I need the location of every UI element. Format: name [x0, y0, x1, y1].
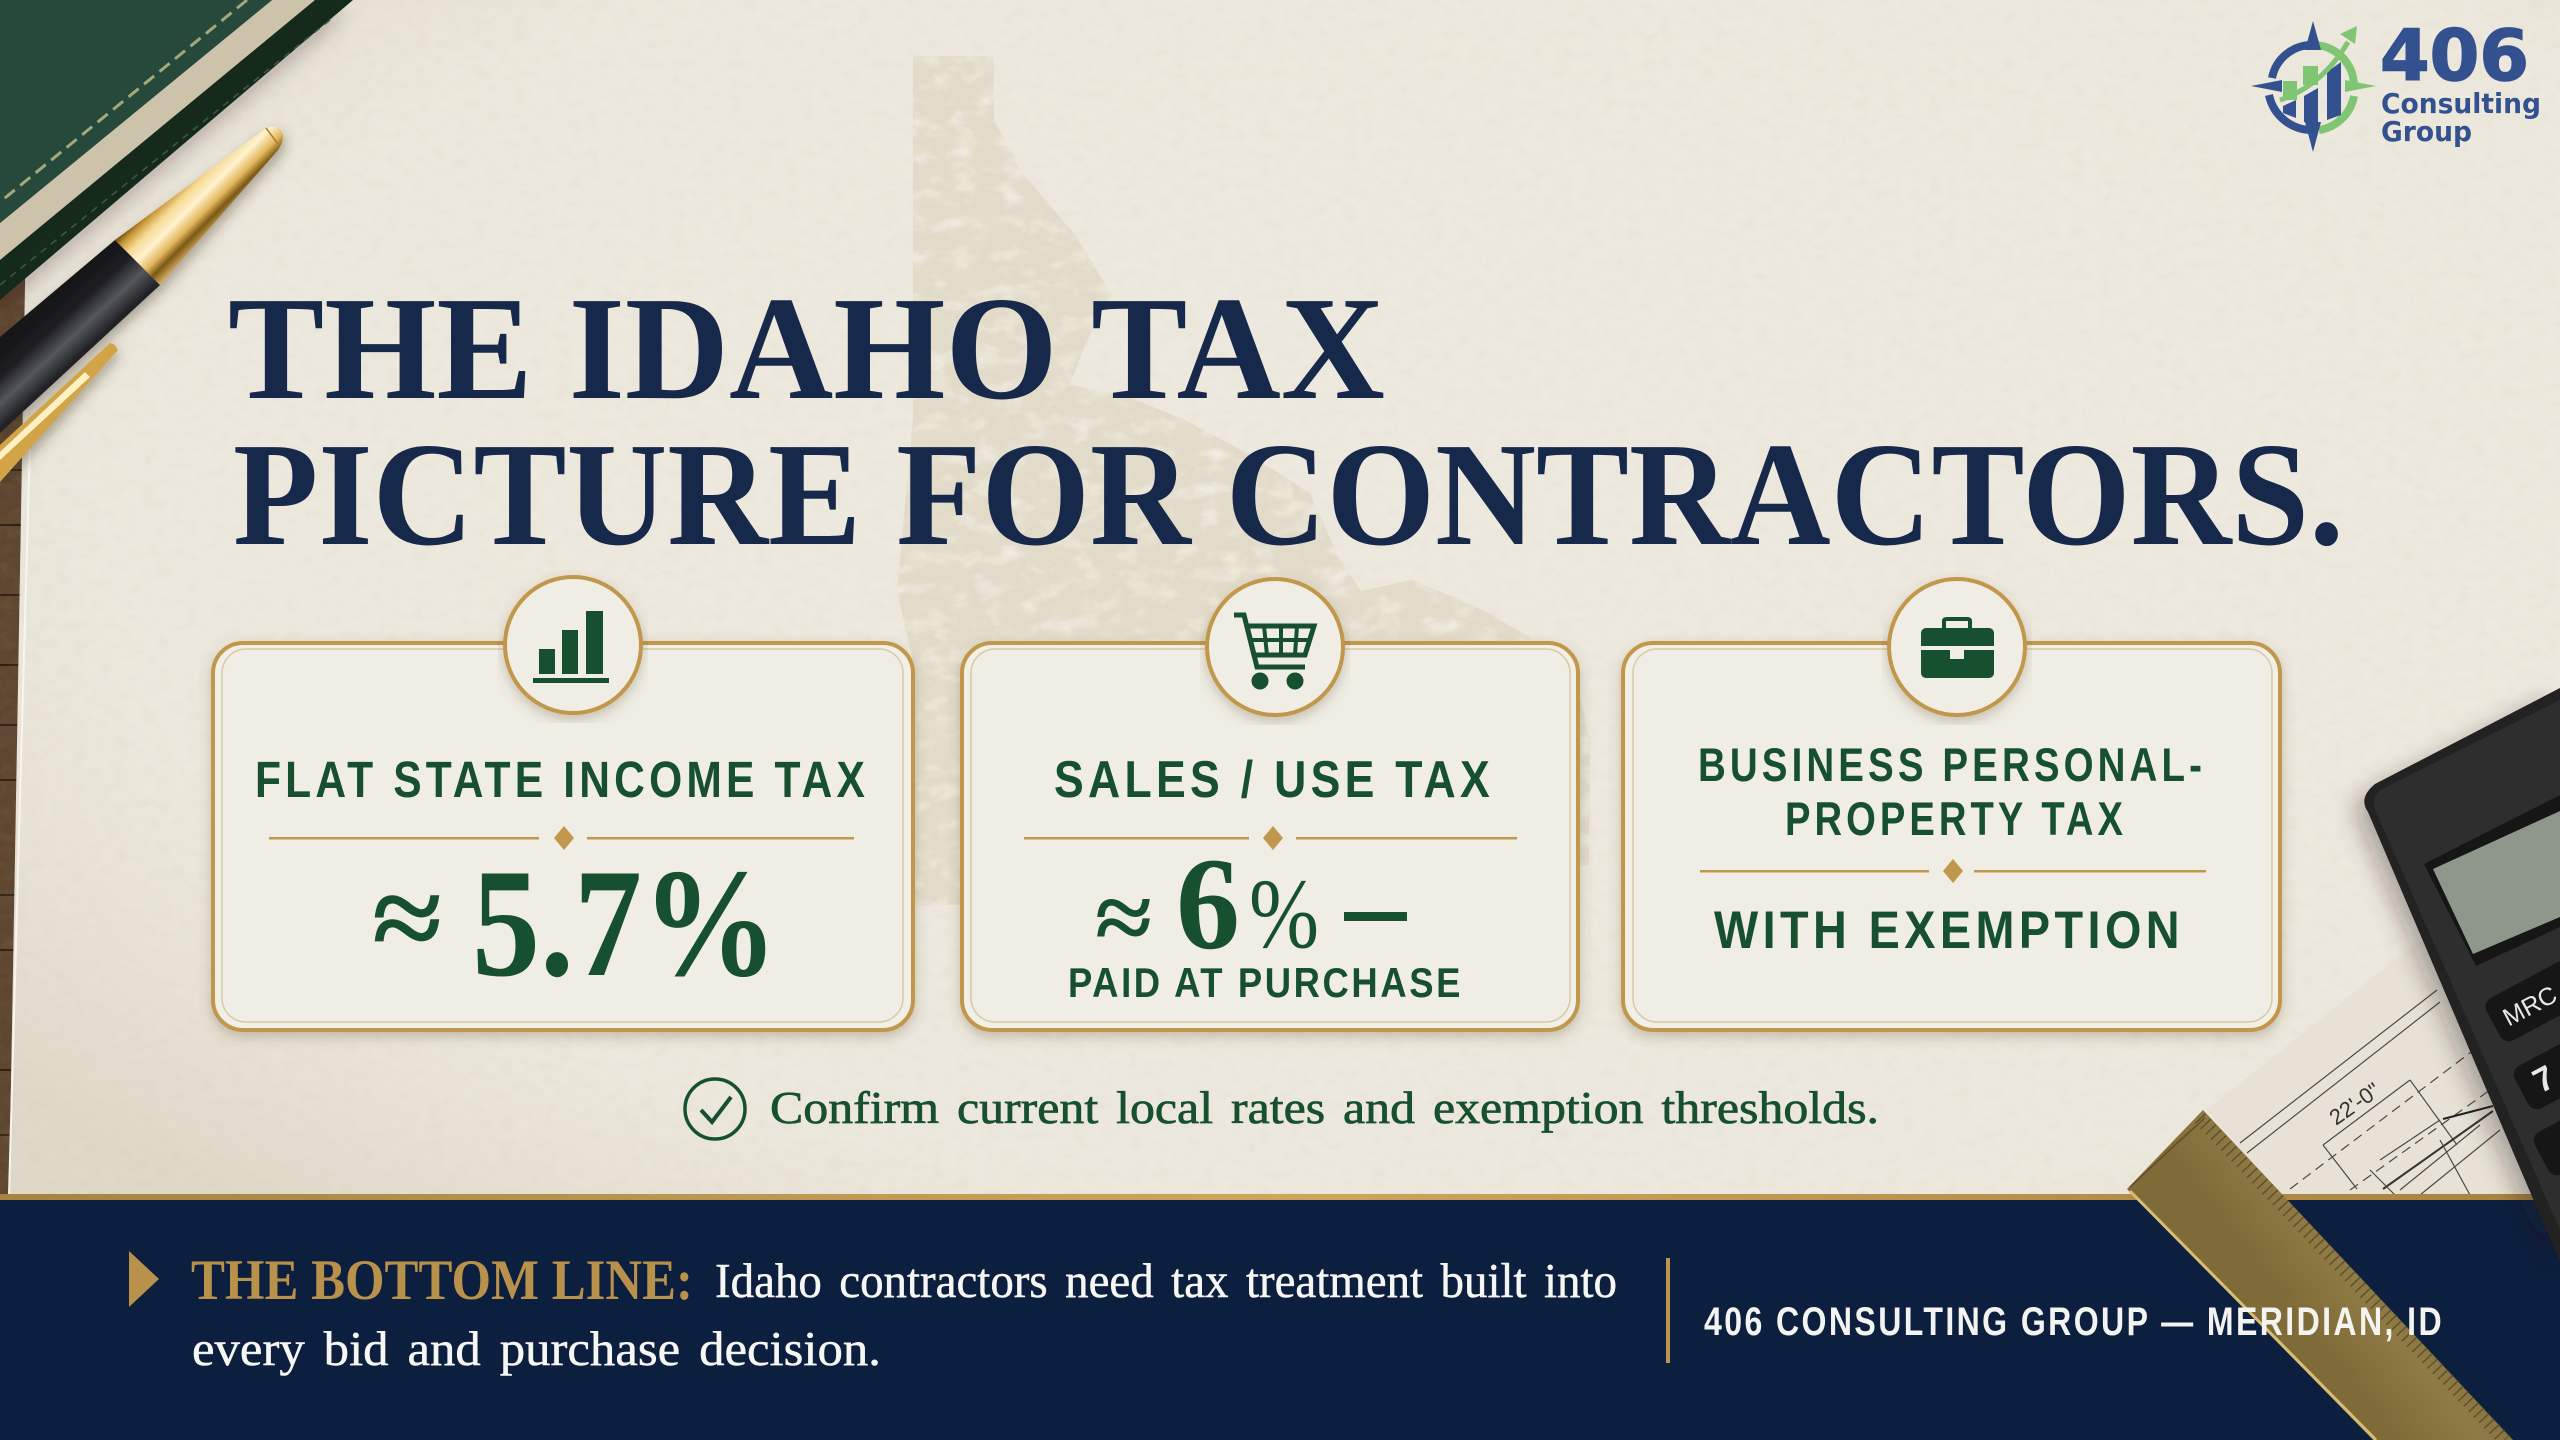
value: approx 6%: 6: [1176, 830, 1240, 977]
bottom line statement: [129, 1249, 1617, 1376]
with exemption: WITH EXEMPTION: [1714, 901, 2184, 960]
note: confirm local rates: Confirm current local rates and exemption thresholds.: [770, 1082, 1879, 1133]
calculator screen: [2433, 811, 2560, 954]
title: PICTURE FOR CONTRACTORS.: [233, 413, 2344, 577]
panel: sales / use tax: [962, 579, 1578, 1030]
icon: check circle: [685, 1079, 745, 1139]
icon: bar chart badge: [505, 577, 641, 713]
value: approx 6%: %: [1249, 858, 1319, 969]
calculator: [2364, 688, 2560, 1262]
logo: 406 Consulting Group: Consulting: [2381, 87, 2541, 120]
notebook: [0, 0, 353, 300]
value: approx 5.7%: ≈: [372, 853, 442, 984]
paid at purchase: PAID AT PURCHASE: [1068, 959, 1463, 1006]
key: MRC: [2482, 957, 2560, 1045]
divider: [269, 826, 854, 850]
value: approx 5.7%: 5.7%: [472, 837, 778, 1009]
card heading: SALES / USE TAX: [1054, 751, 1494, 809]
icon: compass chart: [2251, 21, 2376, 152]
ruler: [2127, 1110, 2513, 1440]
card heading: BUSINESS PERSONAL-: [1698, 738, 2206, 791]
title: THE IDAHO TAX: [228, 267, 1385, 431]
value: approx 6%: [1095, 830, 1407, 977]
icon: briefcase badge: [1889, 579, 2025, 715]
Idaho state watermark: [897, 56, 1590, 906]
divider: [1700, 859, 2206, 883]
key: 7: [2510, 1025, 2560, 1113]
bottom navy band: [0, 1194, 2560, 1440]
logo: 406 Consulting Group: Group: [2381, 115, 2472, 148]
panel: flat state income tax: [213, 577, 913, 1030]
panel: business personal-property tax: [1623, 579, 2280, 1030]
card heading: FLAT STATE INCOME TAX: [255, 751, 869, 808]
bottom line statement: Idaho contractors need tax treatment built into: [715, 1253, 1617, 1308]
key: blank: [2530, 1091, 2560, 1179]
pen: [0, 127, 283, 482]
value: approx 6%: ≈: [1095, 864, 1152, 971]
dimension label: 22'-0": [2325, 1077, 2385, 1130]
title: [228, 267, 2344, 577]
logo: 406 Consulting Group: [2251, 15, 2541, 152]
bottom line statement: every bid and purchase decision.: [192, 1321, 881, 1376]
key: MRC: MRC: [2498, 981, 2560, 1032]
blueprint sheet: [2240, 990, 2500, 1194]
card heading: PROPERTY TAX: [1785, 792, 2127, 845]
card heading: [1698, 738, 2206, 845]
divider: [1024, 826, 1517, 850]
icon: gold arrow: [129, 1251, 159, 1307]
value: approx 5.7%: [372, 837, 778, 1009]
bottom line statement: THE BOTTOM LINE:: [191, 1249, 693, 1312]
footer divider: [1666, 1258, 1670, 1363]
icon: shopping cart badge: [1207, 579, 1343, 715]
logo wordmark: 406: [2380, 15, 2529, 97]
